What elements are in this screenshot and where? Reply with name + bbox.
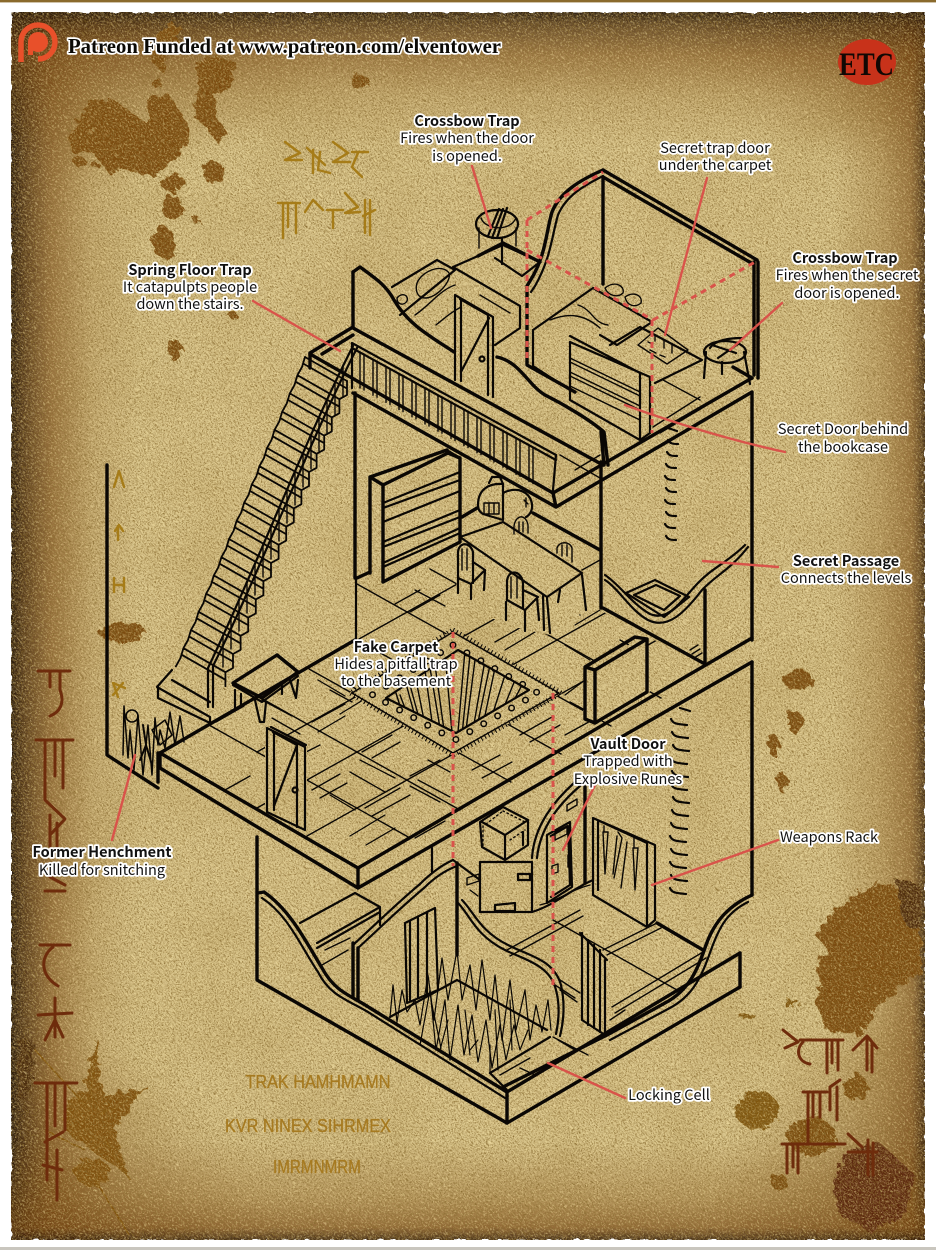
callout: secret passage: Secret Passage (793, 550, 899, 571)
rune inscriptions: TRAK HAMHMAMN (246, 1072, 390, 1092)
callout: fake carpet: to the basement (341, 670, 452, 691)
callout: secret door: Secret Door behind (778, 418, 908, 439)
basement shell (257, 662, 752, 1123)
mid floor slab (160, 638, 752, 888)
hidden passage dashed lines (453, 172, 755, 990)
ladder rungs, lower (670, 708, 690, 894)
callout: secret trap door (659, 137, 772, 175)
callout: locking cell: Locking Cell (628, 1084, 710, 1105)
callout: former henchman: Former Henchment (32, 841, 172, 862)
icon: crossbow trap by the bedroom corner (704, 338, 752, 384)
stove (478, 477, 532, 520)
callout line: second crossbow (730, 303, 782, 350)
callout: crossbow trap secret door (776, 247, 919, 303)
callout: secret door: the bookcase (798, 436, 888, 457)
callout line: weapons rack (652, 840, 778, 885)
small table by stairs (233, 655, 298, 722)
callout: vault door (574, 733, 682, 789)
callout: vault door: Trapped with (583, 750, 673, 771)
callout line: locking cell (548, 1063, 625, 1098)
rune inscriptions: KVR NINEX SIHRMEX (225, 1116, 391, 1136)
weapons rack (593, 818, 703, 950)
basement curved wall (458, 880, 593, 1036)
stairs (157, 346, 357, 723)
callout: secret trap door: Secret trap door (660, 137, 770, 158)
vault chest (453, 782, 585, 912)
callout: secret trap door: under the carpet (659, 154, 772, 175)
top floor structure (310, 170, 758, 507)
callout: vault door: Vault Door (589, 733, 666, 754)
callout: secret door (778, 418, 908, 457)
ladder rungs, upper (665, 428, 678, 540)
patreon logo (21, 25, 55, 62)
callout line: henchman (112, 755, 135, 840)
callout line: vault door (563, 785, 595, 850)
callout: vault door: Explosive Runes (574, 768, 682, 789)
callout: crossbow trap door: Fires when the door (400, 127, 534, 148)
floor tile grid (209, 560, 661, 845)
callout: secret passage (781, 550, 911, 588)
basement left room (300, 860, 457, 1003)
bookcase on top floor (570, 336, 650, 440)
low wall on mid floor (565, 637, 702, 723)
callout: fake carpet (334, 636, 458, 691)
secret passage (605, 545, 748, 664)
railing (352, 343, 556, 490)
callout: weapons rack: Weapons Rack (780, 826, 878, 847)
callout: crossbow trap door (400, 110, 534, 166)
callout: crossbow trap door: Crossbow Trap (414, 110, 520, 131)
callout line: spring floor (253, 301, 340, 351)
icon: ETC badge (838, 39, 896, 85)
callout: fake carpet: Fake Carpet (354, 636, 438, 657)
callout: spring floor trap: down the stairs. (136, 293, 244, 314)
callout: former henchman (32, 841, 172, 880)
callout line: secret trap door (665, 178, 707, 335)
callout: crossbow trap secret door: Fires when the secret (776, 264, 919, 285)
rune inscriptions: IMRMNMRM (273, 1157, 361, 1177)
title: Patreon Funded at www.patreon.com/elventower (68, 34, 501, 58)
callout: secret passage: Connects the levels (781, 567, 911, 588)
vault door (547, 822, 572, 903)
left bedroom furniture (392, 245, 540, 345)
callout line: secret passage (703, 561, 778, 567)
left boundary and dead henchman (107, 465, 184, 788)
callout: crossbow trap door: is opened. (432, 145, 502, 166)
dining table and chairs (458, 517, 586, 633)
callout: crossbow trap secret door: door is opened. (794, 282, 900, 303)
callout line: secret door (625, 405, 785, 452)
callout line: crossbow trap (472, 166, 491, 228)
callout: crossbow trap secret door: Crossbow Trap (792, 247, 898, 268)
top floor door (455, 295, 493, 397)
callout: spring floor trap (123, 259, 257, 314)
callout: spring floor trap: It catapulpts people (123, 276, 257, 297)
basement floor tiles and cell bars (490, 910, 706, 1090)
fake carpet and pit (350, 630, 561, 755)
callout: former henchman: Killed for snitching (39, 859, 165, 880)
callout: fake carpet: Hides a pitfall trap (334, 653, 458, 674)
isometric tower drawing (107, 170, 758, 1123)
icon: ETC badge: ETC (839, 47, 894, 83)
mid floor door (267, 727, 306, 830)
basement pit spikes (390, 950, 551, 1073)
rune inscriptions (35, 142, 877, 1200)
callout: spring floor trap: Spring Floor Trap (128, 259, 252, 280)
mid level bookcase (370, 450, 460, 582)
right bedroom furniture (533, 284, 702, 390)
icon: crossbow trap on the back wall (476, 208, 540, 264)
mid level walls (355, 393, 752, 664)
